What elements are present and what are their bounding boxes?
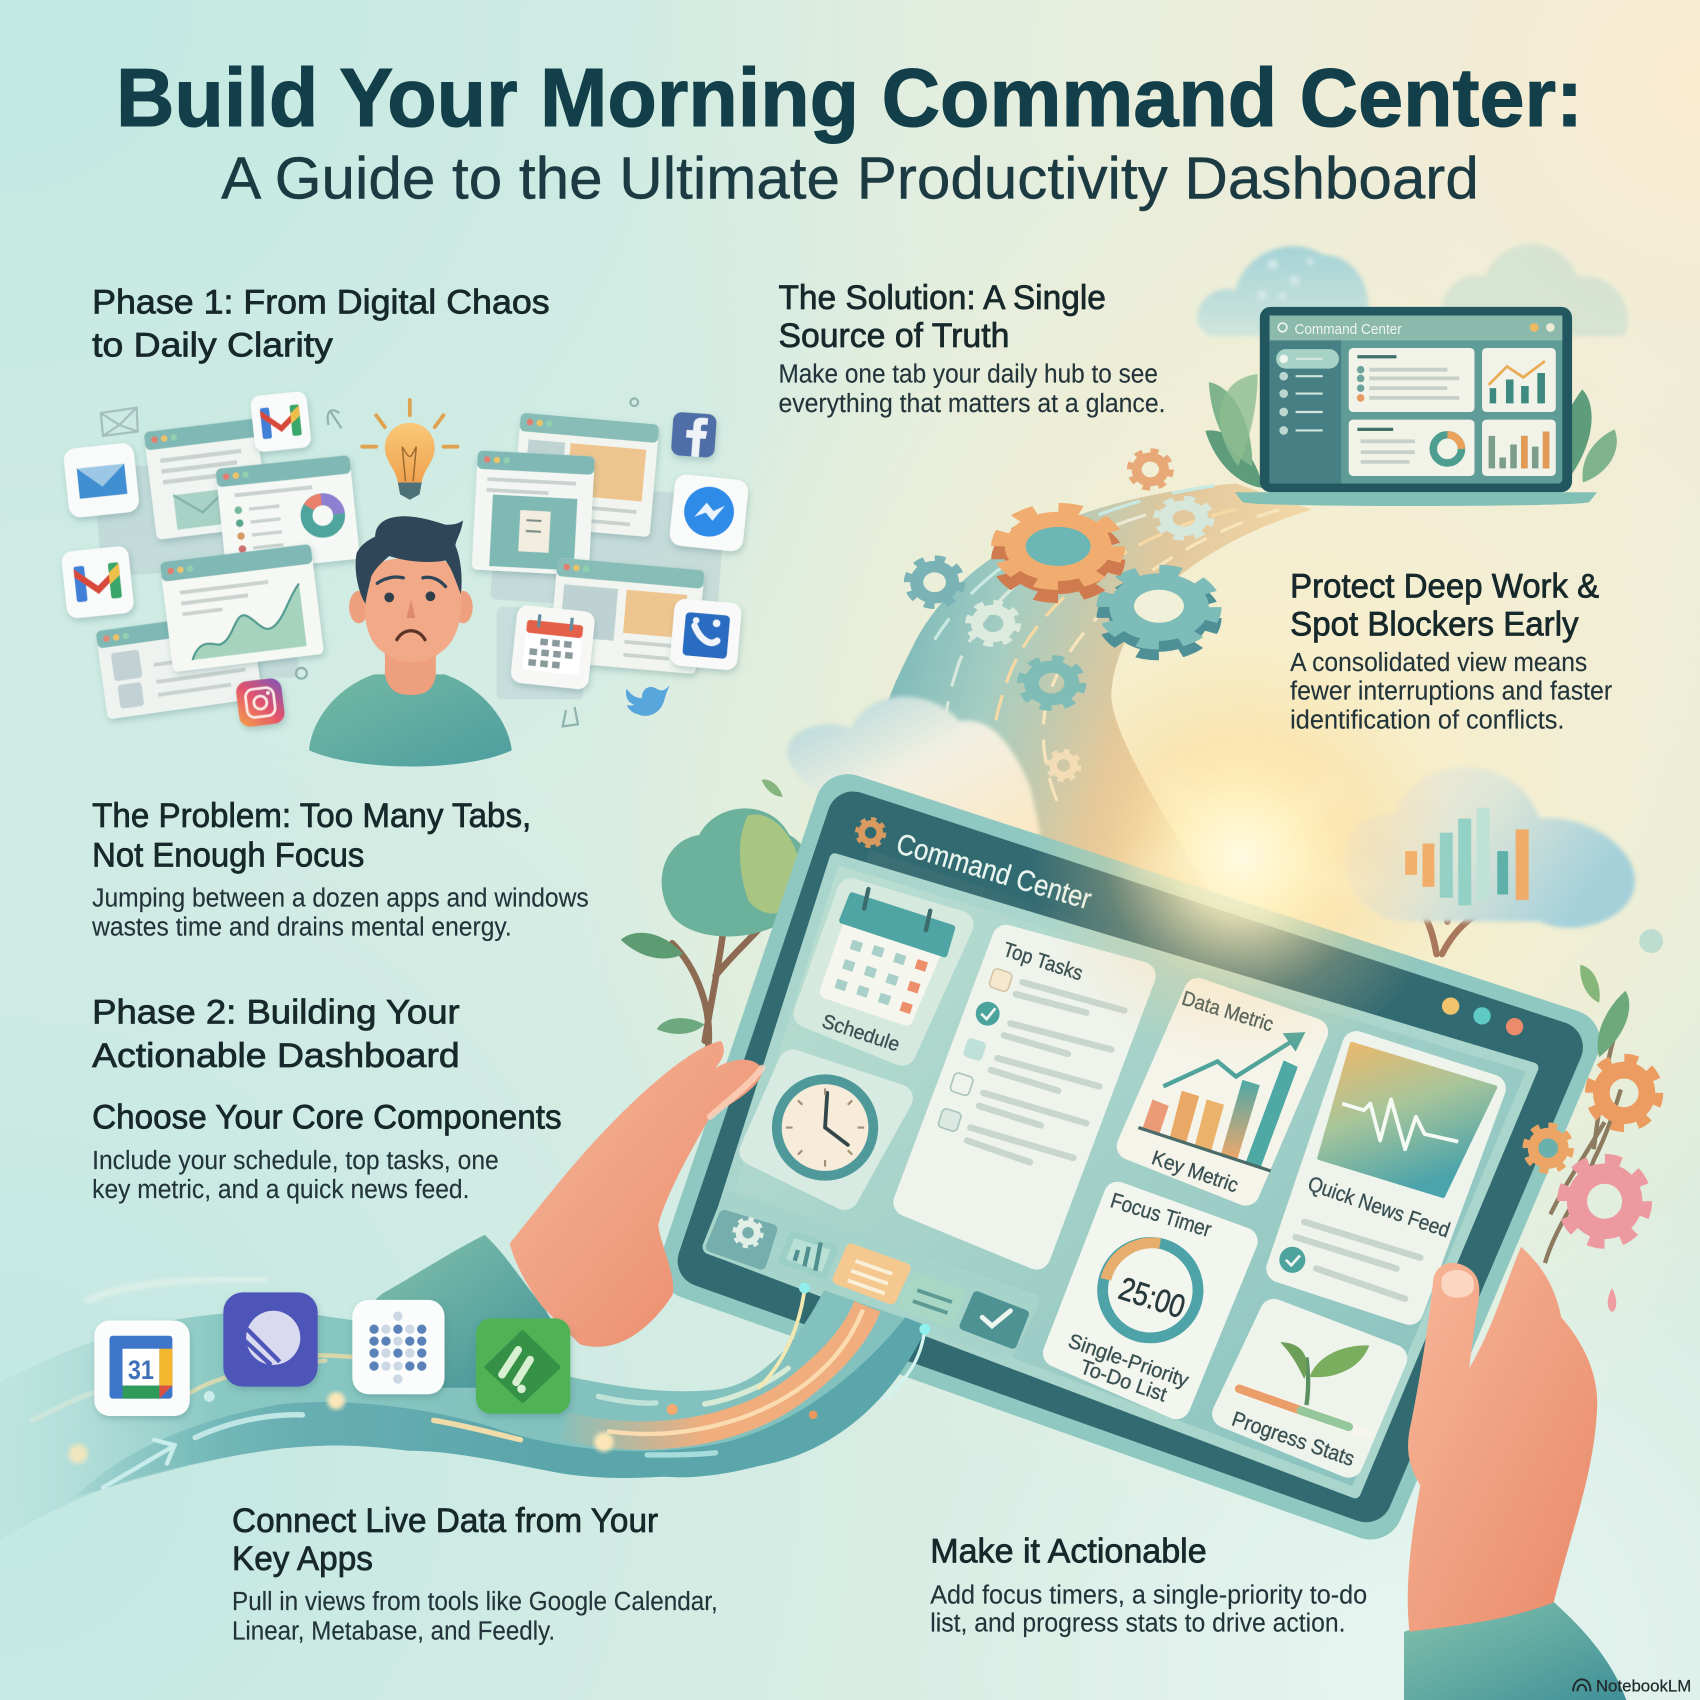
panel: focus timer [1057,1188,1244,1407]
text: connect live data: Connect Live Data from Your [232,1502,658,1540]
header title and controls [857,819,1523,1035]
window: line chart [160,544,324,672]
subtitle: A Guide to the Ultimate Productivity Dashboard [221,144,1479,211]
text: make it actionable: list, and progress stats to drive action. [930,1610,1345,1638]
text: the problem: The Problem: Too Many Tabs, [92,797,531,835]
calendar day number: 31 [128,1354,154,1385]
left sleeve and hand [357,1041,762,1388]
text: connect live data: Key Apps [232,1540,373,1578]
road base [0,1290,927,1540]
icon: envelope outline [101,408,138,436]
icon: google calendar [94,1321,190,1416]
icon: blue app tile [669,598,742,671]
road streaks [33,1279,788,1455]
illustration: laptop with command center [1197,244,1630,506]
gear: small white centre [969,603,1017,643]
text: the problem: Jumping between a dozen apps and windows [92,884,589,912]
text: the solution: The Solution: A Single [778,279,1106,317]
text: connect live data: Linear, Metabase, and Feedly. [232,1617,555,1645]
gear: tiny tan [1048,751,1079,780]
text: the problem: Not Enough Focus [92,836,364,874]
text: protect deep work [1290,567,1613,735]
window: article right front [549,558,705,674]
icon: instagram [235,677,286,728]
icon: gmail tile left [61,545,135,619]
road arrow [103,1440,175,1488]
leaves around laptop [1204,374,1630,500]
data metric label: Data Metric [1179,987,1276,1036]
text: make it actionable [930,1532,1367,1638]
gear: small orange [1130,451,1170,488]
icon: metabase [352,1300,445,1394]
text: the problem: wastes time and drains mental energy. [91,914,512,942]
top tasks label: Top Tasks [1000,938,1086,985]
text: protect deep work: A consolidated view means [1290,649,1587,677]
road lower band [76,1317,927,1496]
tablet outer frame [692,807,1568,1507]
panel: schedule [808,889,960,1056]
back grey windows [93,458,726,699]
icon: linear [223,1292,318,1387]
window: bottom left list [96,610,263,719]
text: the solution: everything that matters at a glance. [778,390,1165,418]
window: article right back [511,413,659,537]
gear: small teal left [908,559,961,605]
text: the solution [778,279,1165,418]
icon: twitter bird [626,685,670,716]
illustration: left tree [620,774,812,1057]
text: choose core components [92,1099,562,1204]
data road and app connections [0,1279,930,1540]
tablet dashboard [692,807,1568,1507]
single priority label: Single-Priority [1065,1330,1192,1392]
text: choose core components: key metric, and a quick news feed. [92,1176,469,1204]
road ribbon [880,484,1312,900]
text: the solution: Make one tab your daily hub to see [778,361,1158,389]
timer digits: 25:00 [1115,1270,1190,1325]
orange data stream [564,1306,867,1435]
cloud left of tablet [787,697,1041,835]
text: protect deep work: Protect Deep Work & [1290,567,1599,605]
watermark: NotebookLM: NotebookLM [1596,1677,1691,1695]
icon: light bulb [362,400,458,500]
icon: feedly [476,1318,570,1414]
icon: facebook [671,412,717,458]
panel: quick news feed [1279,1044,1495,1311]
text: protect deep work: identification of conflicts. [1290,707,1564,735]
icon: calendar tile [510,604,596,690]
text: phase 1 heading: to Daily Clarity [92,327,334,365]
icon: mail tile [63,442,140,518]
key metric label: Key Metric [1149,1146,1241,1197]
illustration: digital chaos [61,391,749,767]
gear: medium teal low [1022,659,1081,707]
text: phase 2 heading [92,993,460,1075]
gear: small white right [1158,499,1210,537]
illustration: gear flowers [1526,929,1663,1312]
icon: gmail tile top [250,391,312,453]
connector lights to dock [759,1283,930,1399]
laptop screen [1260,307,1572,492]
illustration: data cloud and tree [1344,767,1635,954]
to-do list label: To-Do List [1077,1356,1170,1407]
text: make it actionable: Make it Actionable [930,1532,1207,1570]
news feed label: Quick News Feed [1305,1172,1453,1242]
text: protect deep work: fewer interruptions and faster [1290,677,1613,705]
sun glow [1030,645,1453,1068]
clouds behind laptop [1197,244,1628,336]
text: phase 1 heading [92,283,550,365]
text: phase 2 heading: Phase 2: Building Your [92,993,460,1031]
tablet screen [710,859,1533,1493]
tablet inner frame [704,817,1557,1496]
gear: big orange [1001,509,1115,597]
icon: messenger tile [669,473,749,552]
window: donut chart [215,455,360,573]
panel: progress stats [1226,1313,1393,1471]
focus timer label: Focus Timer [1108,1188,1215,1242]
window: layered document [472,450,595,576]
text: connect live data: Pull in views from tools like Google Calendar, [232,1588,718,1616]
laptop base [1235,492,1597,506]
panel: clock [754,1064,899,1196]
gear: big teal [1106,571,1212,654]
panel: data metric [1131,987,1314,1197]
dock toolbar [710,1198,1032,1352]
schedule label: Schedule [819,1011,902,1056]
glow nodes [68,1391,817,1464]
right hand and sleeve [1404,1247,1626,1700]
app icons row [94,1292,570,1416]
text: phase 2 heading: Actionable Dashboard [92,1037,460,1075]
header title and controls: Command Center [892,828,1095,916]
text: choose core components: Choose Your Core Components [92,1099,562,1137]
text: the problem [91,797,589,942]
small scattered marks [296,398,638,726]
text: make it actionable: Add focus timers, a single-priority to-do [930,1582,1367,1610]
title: Build Your Morning Command Center: [116,52,1583,144]
text: choose core components: Include your schedule, top tasks, one [92,1147,499,1175]
text: the solution: Source of Truth [778,317,1009,355]
person worried [309,516,512,767]
progress stats label: Progress Stats [1229,1408,1357,1471]
text: connect live data [232,1502,718,1645]
window: email [144,419,269,540]
text: phase 1 heading: Phase 1: From Digital Chaos [92,283,550,321]
illustration: flow road with gears [787,451,1312,900]
panel: top tasks [907,938,1142,1255]
text: protect deep work: Spot Blockers Early [1290,605,1579,643]
laptop title: Command Center [1295,322,1402,338]
